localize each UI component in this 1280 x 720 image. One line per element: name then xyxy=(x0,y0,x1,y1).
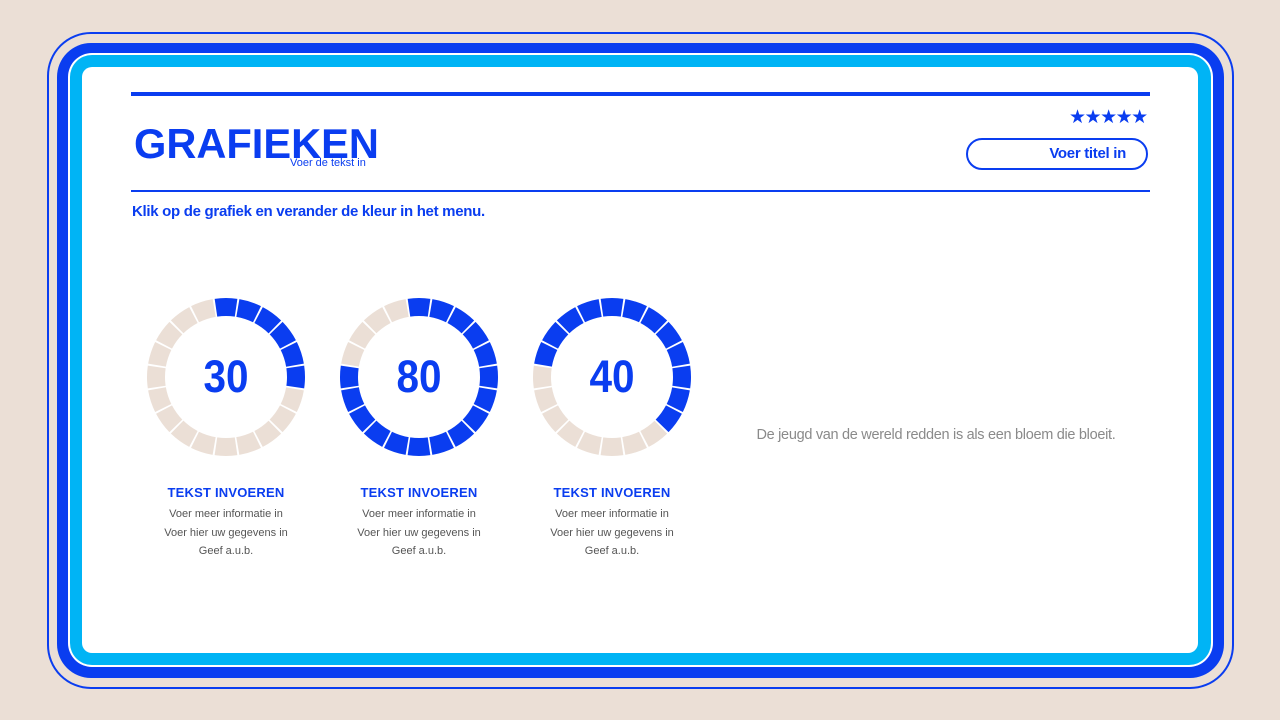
donut 30: 30 xyxy=(203,352,249,403)
subtitle: Klik op de grafiek en verander de kleur in het menu. xyxy=(132,203,485,220)
label 1: Voer meer informatie in xyxy=(169,508,283,520)
donut 40: 40 xyxy=(589,352,635,403)
title: GRAFIEKEN xyxy=(134,120,379,167)
label 3: TEKST INVOEREN xyxy=(554,485,670,500)
label 3: Voer hier uw gegevens in xyxy=(550,526,674,538)
label 3: Voer meer informatie in xyxy=(555,508,669,520)
label 2 xyxy=(357,485,481,557)
label 1: TEKST INVOEREN xyxy=(168,485,284,500)
donut 40 xyxy=(513,278,711,476)
label 2: Geef a.u.b. xyxy=(392,545,446,557)
donut 80 xyxy=(320,278,518,476)
label 2: Voer meer informatie in xyxy=(362,508,476,520)
label 1: Geef a.u.b. xyxy=(199,545,253,557)
label 1: Voer hier uw gegevens in xyxy=(164,526,288,538)
button: Voer titel in xyxy=(1049,145,1126,162)
button xyxy=(966,138,1148,170)
donut 80: 80 xyxy=(396,352,442,403)
quote: De jeugd van de wereld redden is als een bloem die bloeit. xyxy=(756,427,1116,443)
label 3: Geef a.u.b. xyxy=(585,545,639,557)
card xyxy=(82,67,1198,653)
title: Voer de tekst in xyxy=(290,157,366,169)
donut 30 xyxy=(127,278,325,476)
stars: ★★★★★ xyxy=(1069,107,1147,128)
label 2: Voer hier uw gegevens in xyxy=(357,526,481,538)
label 2: TEKST INVOEREN xyxy=(361,485,477,500)
label 1 xyxy=(164,485,288,557)
label 3 xyxy=(550,485,674,557)
